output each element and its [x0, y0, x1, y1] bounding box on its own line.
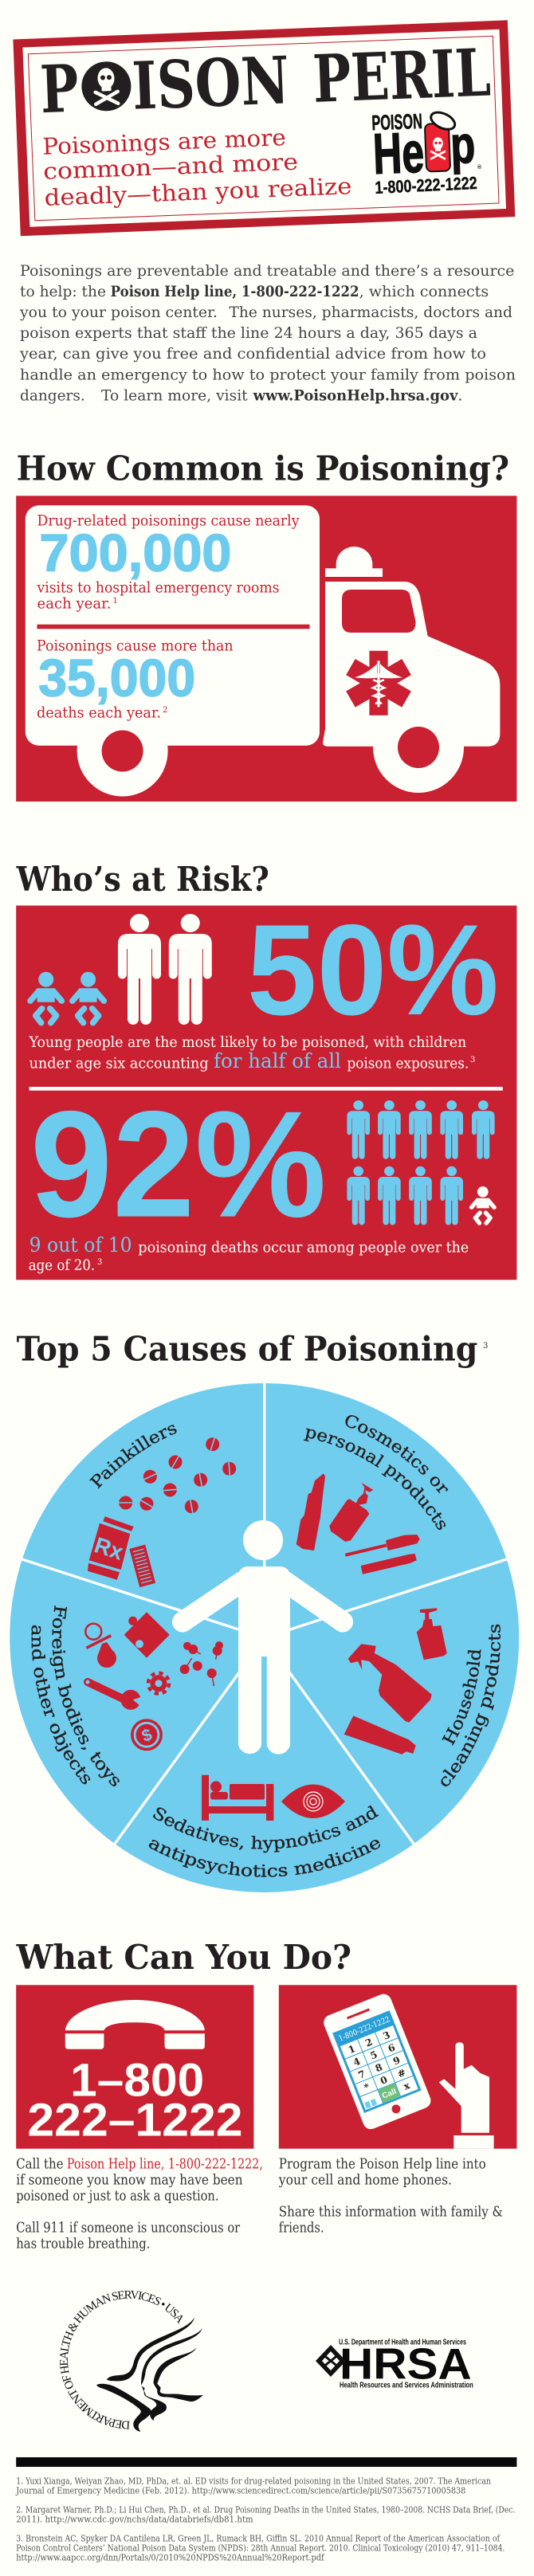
text: program instructions: [278, 2156, 503, 2237]
logo: HRSA: HRSA: [340, 2339, 472, 2389]
segment: sedatives: Sedatives, hypnotics and: [153, 1806, 379, 1853]
Poison Help logo: He: [372, 121, 426, 186]
segment: foreign bodies: Foreign bodies, toys: [49, 1606, 120, 1786]
text: young people: [29, 1034, 475, 1072]
panel: ambulance: [16, 496, 516, 802]
icon: pump bottle: [329, 1483, 373, 1542]
intro paragraph: [19, 262, 516, 404]
stat: 700,000 visits: Drug-related poisonings cause nearly: [37, 512, 300, 529]
tagline: deadly—than you realize: [44, 173, 352, 211]
icon: mobile phone: 7: [356, 2068, 367, 2081]
heading: Who's at Risk?: Who’s at Risk?: [16, 860, 269, 900]
text: young people: poison exposures.: [347, 1056, 469, 1072]
text: young people: 3: [470, 1056, 475, 1065]
segment: sedatives: [148, 1775, 381, 1877]
icon: person: [183, 1520, 343, 1755]
Poison Help logo: POISON: [371, 109, 422, 135]
heading: Top 5 Causes: Top 5 Causes of Poisoning: [17, 1329, 477, 1368]
intro paragraph: year, can give you free and confidential advice from how to: [19, 345, 486, 363]
footnotes: 2011). http://www.cdc.gov/nchs/data/databriefs/db81.htm: [16, 2514, 253, 2524]
icon: mobile phone: 0: [379, 2074, 389, 2087]
Poison Help logo: p: [450, 115, 477, 174]
text: program instructions: Program the Poison Help line into: [279, 2156, 486, 2173]
segment: household cleaning: Household: [442, 1649, 481, 1746]
icon: mobile phone: 1-800-222-1222: [338, 2015, 391, 2044]
phone number: [27, 2055, 243, 2147]
title: [39, 34, 492, 128]
tagline: [42, 124, 352, 211]
icon: coin: [132, 1720, 161, 1750]
text: young people: for half of all: [214, 1049, 341, 1072]
intro paragraph: you to your poison center.: [19, 304, 218, 321]
Poison Help logo: 1-800-222-1222: [375, 173, 477, 198]
icon: gear: [148, 1673, 169, 1694]
icon: mobile phone: 2: [363, 2037, 374, 2049]
icon: mobile phone: 6: [387, 2041, 397, 2055]
intro paragraph: www.PoisonHelp.hrsa.gov: [253, 386, 458, 404]
text: young people: under age six accounting: [29, 1056, 209, 1072]
icon: two babies: [27, 972, 107, 1023]
title: ISON: [131, 42, 291, 125]
stat: 35,000 deaths: 2: [163, 706, 167, 715]
segment: painkillers: Painkillers: [89, 1425, 177, 1488]
footnotes: [15, 2476, 515, 2562]
segment: foreign bodies: [31, 1606, 223, 1786]
panel: program phone: [279, 1985, 516, 2149]
icon: bed: [202, 1775, 273, 1821]
icon: lipstick: [296, 1473, 325, 1551]
segment: cosmetics: personal products: [304, 1428, 446, 1530]
panel: who's at risk: [16, 898, 516, 1280]
icon: Rx bottle: [88, 1516, 155, 1587]
segment: sedatives: antipsychotics medicine: [148, 1839, 381, 1877]
stat: 700,000 visits: 700,000: [40, 523, 231, 582]
icon: pointing hand: [439, 2042, 494, 2149]
intro paragraph: Poisonings are preventable and treatable and there’s a resource: [20, 262, 514, 280]
text: 9 out of 10: 9 out of 10: [29, 1233, 132, 1257]
text: call instructions: [16, 2156, 263, 2253]
icon: mobile phone: x: [402, 2080, 412, 2092]
stat: 700,000 visits: 1: [113, 597, 118, 606]
stat: 700,000 visits: visits to hospital emergency rooms: [37, 578, 279, 596]
phone number: 1–800: [70, 2055, 204, 2107]
text: program instructions: friends.: [279, 2220, 324, 2237]
heading: What Can You Do?: What Can You Do?: [16, 1938, 351, 1978]
text: 9 out of 10: poisoning deaths occur among people over the: [138, 1240, 469, 1256]
heading: Top 5 Causes: 3: [483, 1342, 488, 1351]
text: call instructions: poisoned or just to ask a question.: [16, 2188, 219, 2205]
icon: wrench: [86, 1680, 142, 1710]
stat: 50%: 50%: [247, 898, 499, 1042]
text: 9 out of 10: 3: [97, 1258, 102, 1267]
segment: cosmetics: Cosmetics or: [345, 1415, 448, 1493]
icon: mobile phone: 4: [351, 2056, 362, 2068]
icon: nine adults and a baby: [347, 1100, 497, 1225]
tagline: Poisonings are more: [42, 124, 286, 160]
pie chart: top 5 causes: [10, 1383, 520, 1892]
text: call instructions: Call the: [16, 2156, 64, 2173]
intro paragraph: handle an emergency to how to protect your family from poison: [20, 367, 516, 384]
logo: HRSA: Health Resources and Services Administration: [340, 2382, 473, 2390]
icon: mobile phone: *: [363, 2081, 371, 2093]
icon: ambulance cab: [323, 547, 500, 793]
stat: 35,000 deaths: Poisonings cause more than: [37, 637, 234, 654]
stat: 700,000 visits: each year.: [37, 594, 112, 612]
icon: Rx bottle: Rx: [92, 1532, 127, 1565]
segment: foreign bodies: and other objects: [31, 1625, 91, 1785]
intro paragraph: The nurses, pharmacists, doctors and: [229, 304, 512, 321]
logo: Department of Health and Human Services: DEPARTMENT OF HEALTH & HUMAN SERVICES • USA: [60, 2290, 183, 2429]
stat: 700,000 visits: [37, 512, 300, 612]
text: call instructions: Call 911 if someone is unconscious or: [16, 2220, 241, 2237]
ambulance window: [342, 590, 416, 633]
icon: telephone handset: [65, 2000, 205, 2049]
intro paragraph: to help: the: [20, 283, 106, 300]
intro paragraph: dangers.: [20, 386, 85, 404]
text: call instructions: has trouble breathing.: [16, 2236, 151, 2253]
tagline: common—and more: [43, 149, 299, 185]
text: call instructions: if someone you know may have been: [16, 2172, 243, 2189]
Poison Help logo: ®: [477, 164, 482, 171]
icon: push pins: [180, 1641, 223, 1686]
panel: call the number: [16, 1985, 253, 2149]
icon: mascara: [345, 1535, 420, 1574]
footnotes: Journal of Emergency Medicine (Feb. 2012). http://www.sciencedirect.com/science/article/pii/S0735675710005838: [15, 2485, 465, 2496]
icon: mobile phone: 5: [369, 2049, 379, 2061]
text: 9 out of 10: age of 20.: [29, 1257, 95, 1274]
intro paragraph: Poison Help line, 1-800-222-1222: [111, 283, 359, 300]
intro paragraph: poison experts that staff the line 24 hours a day, 365 days a: [20, 324, 477, 342]
intro paragraph: To learn more, visit: [101, 386, 248, 404]
phone number: 222–1222: [27, 2095, 243, 2147]
icon: spray bottle: [348, 1644, 432, 1723]
icon: hypnotic eye: [281, 1785, 345, 1818]
segment: household cleaning: [344, 1608, 501, 1786]
icon: puzzle piece: [124, 1612, 170, 1658]
icon: ambulance box: [26, 505, 320, 797]
stat: 35,000 deaths: deaths each year.: [37, 704, 161, 722]
icon: mobile phone: #: [396, 2067, 407, 2080]
text: young people: Young people are the most likely to be poisoned, with children: [29, 1034, 466, 1051]
heading: How Common is Poisoning?: How Common is Poisoning?: [17, 449, 509, 489]
icon: soap dispenser: [417, 1608, 447, 1660]
title banner: [13, 20, 515, 236]
logo: HRSA: U.S. Department of Health and Human Services: [339, 2339, 466, 2347]
footnotes: http://www.aapcc.org/dnn/Portals/0/2010%20NPDS%20Annual%20Report.pdf: [16, 2552, 324, 2562]
stat: 35,000 deaths: [37, 637, 234, 722]
stat: 92%: 92%: [30, 1080, 327, 1249]
segment: painkillers: [88, 1425, 236, 1587]
icon: tube: [344, 1715, 416, 1755]
icon: mobile phone: 3: [382, 2029, 392, 2042]
stat: 35,000 deaths: 35,000: [38, 648, 195, 707]
icon: mobile phone: Call: [381, 2088, 398, 2101]
Poison Help logo: [371, 109, 482, 198]
icon: pills: [119, 1437, 236, 1513]
segment: cosmetics: [296, 1415, 448, 1574]
icon: pacifier: [85, 1624, 116, 1668]
text: program instructions: your cell and home phones.: [278, 2172, 452, 2189]
icon: mobile phone: [321, 1992, 433, 2131]
icon: mobile phone: 9: [391, 2054, 402, 2067]
intro paragraph: .: [457, 386, 462, 404]
text: 9 out of 10: [29, 1233, 469, 1274]
intro paragraph: , which connects: [359, 283, 489, 300]
segment: household cleaning: cleaning products: [441, 1624, 501, 1786]
icon: mobile phone: 8: [374, 2061, 384, 2074]
icon: two adults: [118, 914, 212, 1025]
icon: mobile phone: 1: [347, 2043, 357, 2056]
icon: coin: $: [139, 1725, 155, 1746]
icon: skull in the O: [80, 61, 132, 112]
icon: star of life: [346, 651, 411, 716]
text: call instructions: Poison Help line, 1-800-222-1222,: [67, 2156, 263, 2173]
title: P: [39, 50, 80, 128]
